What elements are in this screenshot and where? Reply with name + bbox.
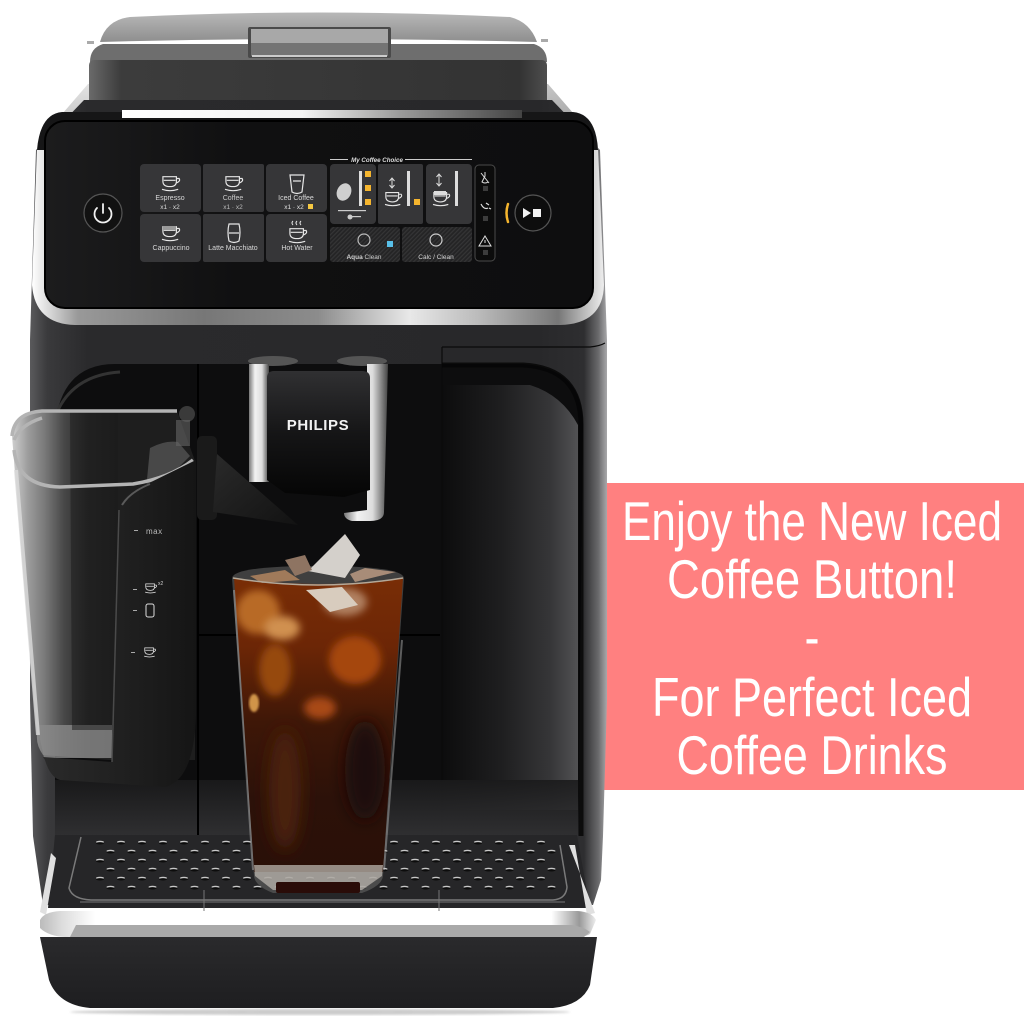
carafe handle panel [43,460,196,787]
drink button: iced coffee [266,164,327,212]
panel: promo banner [600,483,1024,790]
start stop indicator light [506,204,508,222]
chrome trim around control panel [32,115,604,325]
iced coffee glass [230,534,410,893]
carafe glass [12,411,195,760]
drink button: iced coffee: x1 · x2 [284,204,304,211]
drink button: cappuccino [140,214,201,262]
level marking: two cups [133,581,164,593]
drink button: espresso: Espresso [155,195,185,202]
level marking: cup [131,648,156,657]
coffee cavity [55,343,605,836]
machine shoulders and body [30,100,607,905]
milk spout [176,406,298,525]
water tank door [442,385,578,810]
calc clean tile: Calc / Clean [418,254,454,261]
bean hopper lid [87,12,548,106]
milk carafe [12,406,298,787]
banner dash: - [804,606,820,668]
chrome tray edge [40,845,595,915]
coffee dispenser [248,356,388,521]
level marking: max: max [146,527,163,536]
heading: my coffee choice: My Coffee Choice [351,157,403,164]
drink button: latte macchiato: Latte Macchiato [208,245,258,252]
milk length setting tile [426,164,472,224]
upper shoulder shading [50,84,586,128]
strength setting tile [330,164,376,224]
calc clean tile [402,227,472,262]
glass base [254,865,383,890]
banner headline line 4: Coffee Drinks [676,724,948,786]
drink button: cappuccino: Cappuccino [153,245,190,252]
drink button: coffee: Coffee [223,195,243,202]
drink button: hot water [266,214,327,262]
ice cubes [308,534,360,578]
level marking: two cups: x2 [158,581,164,587]
drink button: espresso: x1 · x2 [160,204,180,211]
drink button: hot water: Hot Water [281,245,313,252]
coffee machine [12,12,607,1015]
start stop button [515,195,551,231]
brand name: PHILIPS [287,417,349,434]
level marking: latte [133,604,154,617]
drink button: iced coffee: Iced Coffee [278,195,314,202]
black control panel [45,121,593,308]
drink button: espresso [140,164,201,212]
machine base [40,937,597,1008]
drink button: coffee [203,164,264,212]
lower rear wall [55,780,578,836]
aqua clean tile [330,227,400,262]
power button [84,194,122,232]
drink button: coffee: x1 · x2 [223,204,243,211]
drink button: latte macchiato [203,214,264,262]
status indicator strip [475,165,495,261]
black panel crown [37,112,598,150]
banner headline line 2: Coffee Button! [667,548,957,610]
drip tray [40,835,596,937]
coffee length setting tile [378,164,423,224]
chrome top strip [122,110,522,118]
aqua clean tile: Aqua Clean [346,254,382,261]
